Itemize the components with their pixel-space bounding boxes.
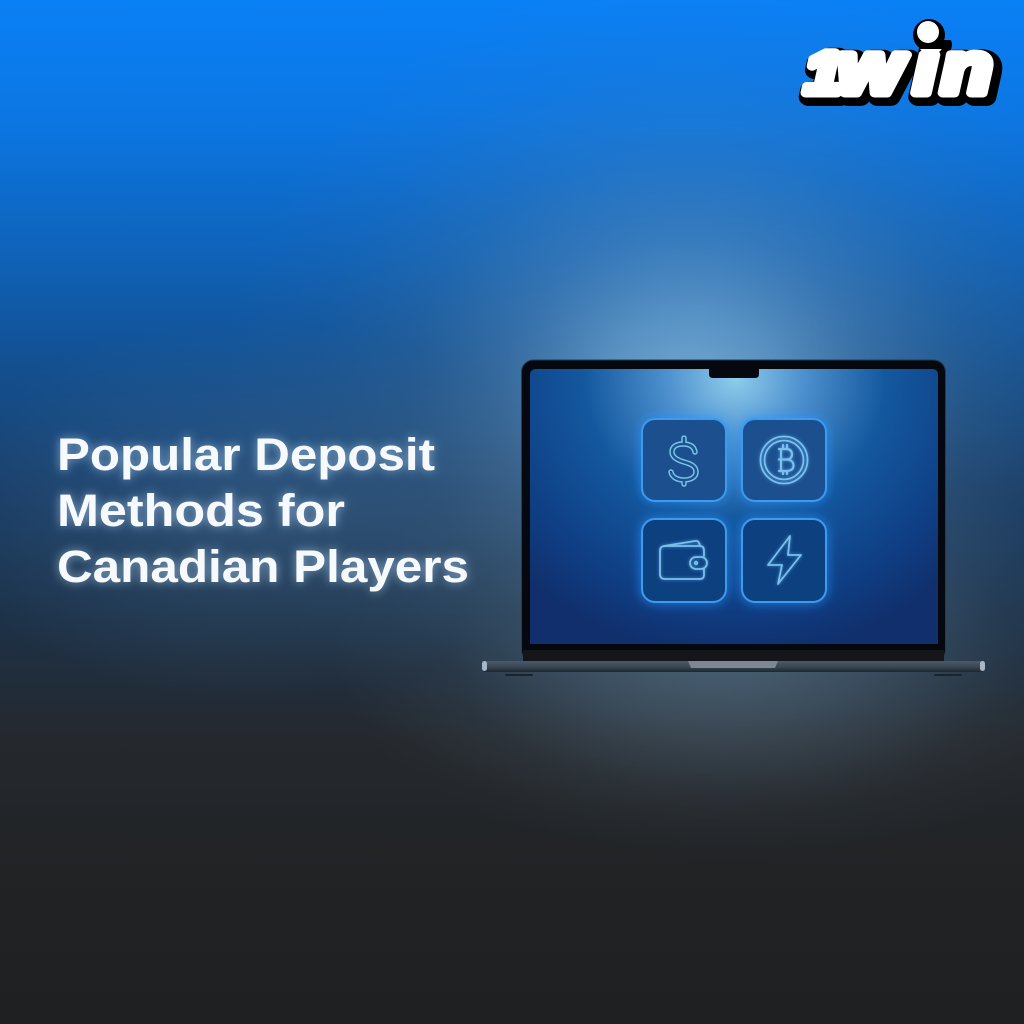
heading: Methods for (57, 485, 345, 536)
bottom bezel (523, 650, 944, 661)
icon: bitcoin coin (760, 436, 808, 484)
tile: bitcoin (742, 419, 826, 501)
logo: 1win: i (917, 33, 942, 113)
logo: 1win: 1 (808, 45, 845, 110)
icon: dollar sign (671, 438, 696, 484)
logo: 1win: n (941, 29, 992, 109)
tile: lightning (742, 519, 826, 602)
heading: Canadian Players (57, 541, 469, 592)
logo: 1win (805, 19, 995, 113)
logo: 1win: 1 (805, 41, 842, 106)
logo: 1win: w (841, 33, 911, 113)
heading: Popular Deposit (57, 429, 435, 480)
logo: 1win: n (945, 33, 995, 113)
tile: wallet (642, 519, 726, 602)
laptop base (482, 661, 985, 676)
icon: lightning bolt (768, 536, 801, 584)
logo: 1win: w (838, 29, 907, 109)
laptop (482, 360, 985, 676)
heading (57, 429, 469, 592)
laptop lid (522, 360, 946, 662)
laptop screen (530, 369, 938, 644)
logo: 1win: i (914, 29, 938, 109)
tile: dollar (642, 419, 726, 501)
icon: wallet (660, 541, 707, 579)
